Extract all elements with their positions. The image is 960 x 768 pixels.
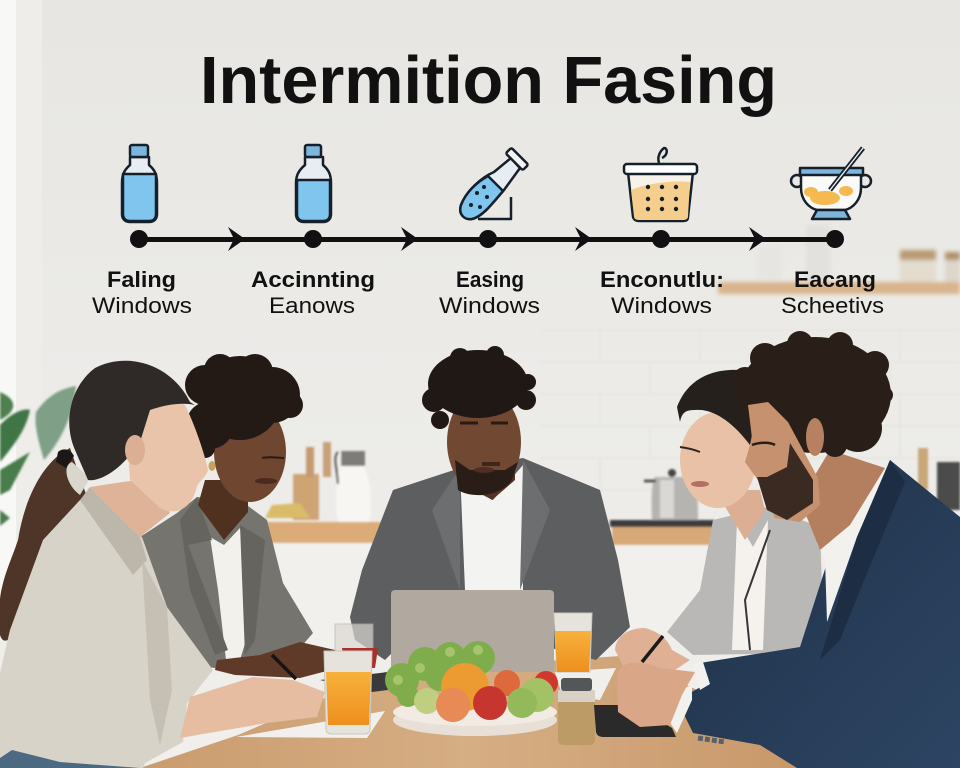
- timeline line: [139, 237, 835, 242]
- label 4: Windows: [611, 293, 712, 318]
- orange juice glass right: [554, 613, 592, 672]
- icon: bucket: [624, 148, 697, 221]
- label 3: [439, 267, 540, 318]
- icon: bottle 2: [296, 145, 331, 222]
- kitchen counter and utensils: [265, 442, 960, 651]
- label 1: Windows: [92, 293, 192, 318]
- pen in hand: [272, 655, 296, 679]
- table: [140, 656, 800, 768]
- label 2: [251, 267, 375, 318]
- label 5: Eacang: [794, 267, 876, 292]
- label 1: Faling: [107, 267, 176, 292]
- person: woman in light grey blazer: [615, 370, 822, 680]
- timeline dots: [130, 230, 844, 248]
- papers and glass on table: [272, 624, 616, 700]
- orange juice glass left: [324, 651, 372, 734]
- greens: [385, 641, 495, 707]
- timeline arrows: [228, 227, 766, 251]
- title: Intermition Fasing: [200, 43, 777, 118]
- icon: bottle 1: [122, 145, 157, 222]
- label 4: Enconutlu:: [600, 267, 724, 292]
- label 2: Eanows: [269, 293, 355, 318]
- label 3: Windows: [439, 293, 540, 318]
- label 4: [600, 267, 724, 318]
- person: man in centre: [350, 346, 630, 660]
- person: man with navy blazer: [617, 331, 960, 768]
- icon: tilted flask: [460, 148, 528, 219]
- label 5: Scheetivs: [781, 293, 884, 318]
- tablet: [594, 705, 676, 737]
- person: woman in grey blazer: [140, 354, 338, 678]
- shelf with jars: [718, 225, 960, 294]
- label 1: [92, 267, 192, 318]
- shirt cuffs and hands: [617, 662, 710, 733]
- label 2: Accinnting: [251, 267, 375, 292]
- paper on table: [236, 711, 385, 738]
- jar of nuts: [558, 678, 595, 745]
- label 5: [781, 267, 884, 318]
- timeline: [130, 227, 844, 251]
- red drink glass: [335, 624, 378, 668]
- fruit and salad plate: [385, 641, 558, 736]
- plant: [0, 386, 76, 526]
- laptop: [391, 590, 554, 672]
- icon: bowl with spoon: [791, 148, 871, 219]
- person: woman with ponytail: [0, 361, 325, 768]
- label 3: Easing: [456, 267, 524, 292]
